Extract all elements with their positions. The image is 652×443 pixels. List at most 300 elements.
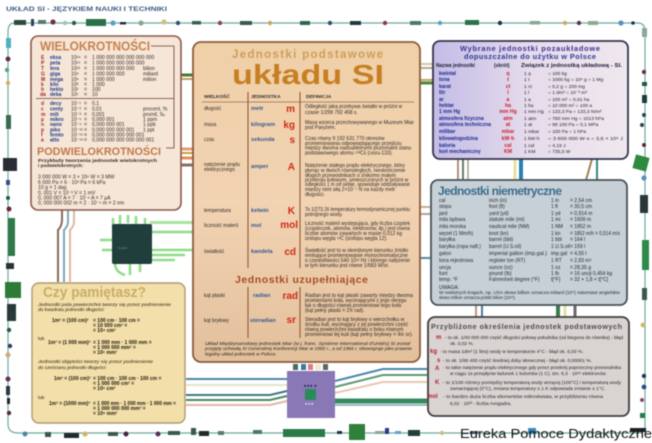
table rows: q	[506, 71, 510, 77]
prefix table: multiples: M	[41, 77, 45, 83]
prefix table: submultiples: 10⁻⁹	[71, 122, 82, 128]
entry: ampere: w ciągu 1s przepłynie ładunek 1 kulomba (1 C), tzn. 6,3 · 10¹⁸ elektronów.	[450, 371, 607, 377]
examples text: i podwielokrotnych:	[38, 163, 84, 169]
table header	[202, 92, 414, 338]
panel: czy pamiętasz	[32, 283, 185, 423]
table rows: litr	[439, 90, 445, 96]
volume unit conversions: 1m³ = (1000 mm)³	[49, 401, 90, 407]
table rows: = 28,35 g	[570, 265, 591, 271]
prefix table: multiples: 100	[92, 87, 101, 93]
table rows: knot (kn)	[489, 231, 509, 237]
table rows: 1 bbl	[551, 237, 562, 243]
row: kilogram: kilogram	[251, 122, 275, 128]
row: mol	[204, 220, 410, 242]
entry: metre: m	[436, 335, 441, 341]
table rows: ct	[506, 84, 511, 90]
volume unit conversions: = 1 000 mm · 1 000 mm · 1 000 mm =	[93, 401, 176, 407]
row: sekunda: czas	[204, 137, 215, 143]
row: metr: metr	[251, 106, 264, 112]
table rows: 1 RT	[551, 258, 562, 264]
volume unit conversions: do sześcianu jednostki długości:	[38, 365, 107, 371]
green circuit chip	[100, 215, 193, 275]
row: radian: promieniami koła, wycinającymi z jego okręgu	[305, 298, 407, 304]
table rows: = 98 100 Pa = 0,1 MPa	[548, 122, 599, 128]
prefix table: multiples: eksa	[50, 55, 61, 61]
heading: Przybliżone określenia jednostek podstawowych	[431, 322, 622, 331]
prefix table: submultiples: 10⁻³	[71, 112, 81, 118]
row: amper: odległości 1 m od siebie, spowoduje oddziaływanie	[305, 182, 410, 188]
table rows: t[°F]	[551, 277, 561, 283]
table rows	[438, 198, 620, 283]
panel: jednostki niemetryczne	[431, 180, 627, 305]
row: radian: radian	[253, 293, 271, 299]
row: sekunda	[204, 135, 411, 156]
prefix table: multiples: miliard	[143, 72, 158, 78]
volume unit conversions: 1m³ = (100 cm)³	[54, 376, 91, 382]
table rows: = 133,3 Pa = 133,3 N/m²	[548, 109, 602, 115]
prefix table: submultiples: 10⁻¹²	[71, 128, 83, 134]
prefix table: multiples: =	[84, 55, 87, 61]
row: kelwin: temperatura	[204, 208, 231, 214]
note	[439, 285, 621, 300]
table rows: baryłka	[439, 237, 455, 243]
area unit conversions: do kwadratu jednostki długości:	[38, 307, 105, 313]
area unit conversions: = 10 000 cm² =	[93, 323, 127, 329]
row: amper: natężenie prądu	[204, 162, 240, 168]
prefix table: multiples: 10¹	[71, 92, 79, 98]
table rows: 1 atm	[524, 116, 536, 122]
prefix table: multiples: G	[41, 72, 45, 78]
row: amper: amper	[251, 164, 269, 170]
table rows: 1 mm Hg	[524, 109, 544, 115]
table header: WIELKOŚĆ	[204, 92, 230, 100]
table rows: nautical mile (NM)	[489, 224, 530, 230]
volume unit conversions	[37, 359, 176, 417]
examples text: 0, 001 V = 10⁻³ V = 1 mV	[38, 190, 96, 196]
row: amper: płynąc w dwóch równoległych, nieskończenie	[305, 168, 406, 174]
volume unit conversions: = 100 cm · 100 cm · 100 cm =	[93, 376, 161, 382]
area unit conversions	[37, 302, 171, 356]
prefix table: submultiples: c	[41, 106, 44, 112]
purple chip	[287, 364, 335, 418]
volume unit conversions: = 1 000 000 000 mm³ =	[93, 406, 146, 412]
row: kilogram: Masa wzorca przechowywanego w Muzeum Miar	[305, 120, 414, 126]
row: amper: Natężenie stałego prądu elektrycznego, który	[305, 163, 406, 169]
prefix table: submultiples: 0,000 000 000 000 000 001	[92, 138, 154, 144]
table rows: = 760 mm Hg = 1013 hPa	[548, 116, 604, 122]
table rows: koń mechaniczny	[439, 149, 481, 155]
table rows: = 100 Pa = 1 hPa	[548, 129, 586, 135]
entry: ampere: A	[435, 366, 440, 372]
row: amper: długich przewodnikach o znikomo małym	[305, 173, 396, 179]
table rows: KM	[504, 149, 512, 155]
footnote: przyjęty uchwałą XI Generalnej Konferencji Miar w 1960 r., a od 1966 r. obowiązuje jako prawnie	[204, 346, 412, 352]
prefix table: submultiples: 10⁻²	[71, 106, 81, 112]
row: sekunda: s	[289, 135, 295, 146]
prefix table: submultiples: 0,000 000 001	[92, 122, 125, 128]
row: mol: (cząsteczek, atomów, elektronów, itp.) jest równa	[305, 226, 410, 232]
row: kandela: o częstotliwości 540·10¹² Hz i którego natężenie	[305, 258, 410, 264]
row: metr: czasie 1/299 792 458 s.	[305, 110, 358, 116]
row: mol: Liczność materii występująca, gdy liczba cząstek	[305, 221, 410, 227]
entry: kelvin: K	[435, 380, 440, 386]
row: mol: mol	[280, 220, 298, 231]
area unit conversions: = 100 cm · 100 cm =	[93, 318, 140, 324]
volume unit conversions: lub	[38, 395, 45, 401]
entry: ampere: - to takie natężenie prądu elektrycznego gdy przez przekrój poprzeczny przewodnika	[443, 365, 621, 371]
row: kandela	[204, 246, 410, 269]
prefix table: multiples: da	[40, 92, 46, 98]
table rows: mila morska	[439, 224, 466, 230]
prefix table: multiples: P	[41, 60, 45, 66]
prefix table: multiples	[36, 46, 174, 148]
row: kelwin: To 1/273,16 temperatury termodynamicznej punktu	[305, 207, 410, 213]
table rows: = 735,5 W	[548, 149, 571, 155]
table rows: tona rejestrowa	[439, 258, 473, 264]
row: kandela: emitujące promieniowanie monochromatyczne	[305, 253, 408, 259]
table rows: 1 U.S.oil	[551, 244, 570, 250]
heading	[460, 44, 600, 61]
row: kelwin	[204, 206, 410, 218]
prefix table: submultiples: 0,000 001	[92, 117, 115, 123]
row: kandela: kandela	[251, 249, 273, 255]
heading: dopuszczalne do użytku w Polsce	[464, 52, 596, 61]
prefix table: submultiples: =	[84, 138, 87, 144]
table rows: = 1609 m	[570, 217, 591, 223]
green circuit chip: SI 2024	[118, 246, 127, 250]
prefix table: multiples: 1 000	[92, 82, 105, 88]
table rows: ar	[439, 97, 444, 103]
row: amper: przekroju kołowym, umieszczonych w próżni w	[305, 178, 409, 184]
prefix table: submultiples: m	[41, 112, 46, 118]
row: kelwin: K	[288, 206, 296, 217]
table rows: 1 oz	[551, 265, 561, 271]
entry: ampere	[435, 365, 621, 377]
table rows: = 1852 m	[570, 224, 591, 230]
row: steradian: równą powierzchni kwadratu o boku równym	[305, 327, 403, 333]
table rows: ha	[505, 103, 511, 109]
table rows: register ton (RT)	[489, 258, 526, 264]
prefix table: submultiples: 0,001	[92, 112, 105, 118]
prefix table: submultiples: atto	[50, 138, 59, 144]
heading: Wybrane jednostki pozaukładowe	[460, 44, 600, 53]
prefix table: multiples: deka	[50, 92, 62, 98]
table rows: = 4,55 l	[570, 251, 587, 257]
table rows: Fahrenheit degree (°F)	[489, 277, 540, 283]
table rows: inch (in)	[489, 198, 507, 204]
entry: second: - to ok. 1/86 400 część średniej doby słonecznej - błąd ok. 0,00001 %.	[443, 358, 592, 364]
table rows: kW·h	[502, 136, 514, 142]
table rows: t	[507, 77, 509, 83]
prefix table: multiples: 10¹⁸	[71, 55, 81, 61]
entry: mole: - to bardzo duża liczba elementów mikroświata, w przybliżeniu równa	[443, 394, 603, 400]
prefix table: submultiples: =	[84, 128, 87, 134]
row: amper: elektrycznego	[204, 167, 235, 173]
table rows: = 3 600 000 W·s = 3,6 × 10⁶ J	[548, 136, 624, 142]
table rows: yard (yd)	[489, 211, 509, 217]
area unit conversions: = 1 000 000 mm² =	[93, 345, 136, 351]
row: kelwin: potrójnego wody.	[305, 212, 343, 218]
table rows: = 30,5 cm	[570, 204, 592, 210]
table rows: 1 yd	[551, 211, 561, 217]
row: radian: rad	[282, 291, 298, 302]
prefix table: submultiples: 10⁻¹⁵	[71, 132, 83, 138]
prefix table: submultiples: =	[84, 101, 87, 107]
row: kilogram: kg	[283, 120, 295, 131]
table rows: 1 ha	[524, 103, 534, 109]
prefix table: multiples: 10³	[71, 82, 79, 88]
purple chip: ■ ■ ■ ■	[304, 384, 316, 388]
prefix table: multiples: 10¹²	[71, 66, 80, 72]
row: radian: Radian jest to kąt płaski zawarty między dwoma	[305, 293, 413, 299]
area unit conversions: = 10⁶ mm²	[93, 350, 117, 356]
table rows: atmosfera fizyczna	[439, 116, 484, 122]
row: amper: długości.	[305, 192, 325, 198]
footnote	[204, 341, 412, 358]
table rows: 1 in	[551, 198, 559, 204]
table rows: karat	[439, 84, 451, 90]
prefix table: multiples: giga	[50, 72, 60, 78]
entry: kelvin: - to 1/100 różnicy pomiędzy temperaturą wody wrzącej (100°C) i temperaturą wody	[443, 380, 622, 386]
prefix table: multiples: 1 000 000 000	[92, 72, 125, 78]
table rows: 1 ft	[551, 204, 559, 210]
prefix table: submultiples: piko	[50, 128, 60, 134]
table rows: l	[507, 90, 509, 96]
table rows: 1 t	[524, 77, 530, 83]
entry: kelvin: zamarzającej (0°C), zmiana temperatury o 1 K odpowiada zmianie o 1°C.	[450, 386, 606, 392]
table rows: stopa	[439, 204, 451, 210]
table header	[436, 63, 623, 69]
prefix table: multiples: =	[84, 60, 87, 66]
row: sekunda: między dwoma nadsubtelnymi poziomami stanu	[305, 146, 411, 152]
table rows: = 0,914 m	[570, 211, 592, 217]
prefix table: submultiples: 1 ppb	[143, 122, 156, 128]
prefix table: submultiples: mikro	[50, 117, 64, 123]
examples text: 10 g = 1 dag	[38, 185, 67, 191]
prefix table: submultiples: promil, ‰	[143, 112, 165, 118]
table rows: imperial gallon (imp.gal.)	[489, 251, 547, 257]
panel: jednostki podstawowe	[193, 42, 420, 362]
table rows: milibar	[439, 129, 455, 135]
prefix table: multiples: =	[84, 82, 87, 88]
panel: jednostki pozaukładowe	[433, 41, 628, 159]
prefix table: submultiples: 0,1	[92, 101, 99, 107]
table header: (skrót)	[494, 63, 510, 69]
table rows: 1 NM	[551, 224, 563, 230]
table rows: = 164 l	[570, 237, 585, 243]
row: mol: izotopu węgla ¹²C (izotopu węgla 12).	[305, 236, 388, 242]
row: steradian: środku kuli, wycinający z jej powierzchni część	[305, 322, 409, 328]
table header: JEDNOSTKA	[251, 94, 281, 100]
table rows: kwintal	[439, 71, 457, 77]
table rows: 1 ct	[524, 84, 533, 90]
table rows: pound (lb)	[489, 271, 512, 277]
row: mol: liczność materii	[204, 223, 238, 229]
prefix table: submultiples: µ	[41, 117, 44, 123]
table rows: 1 cal	[524, 143, 534, 149]
subtitle: Jednostki podstawowe	[232, 49, 383, 61]
table rows: 1 mi	[551, 217, 560, 223]
table rows: kilowatogodzina	[439, 136, 478, 142]
prefix table: submultiples: =	[84, 112, 87, 118]
row: sekunda: Czas równy 9 192 631 770 okresów	[305, 136, 385, 142]
heading: podwielokrotności: PODWIELOKROTNOŚCI	[37, 145, 161, 158]
table rows: tona	[439, 77, 450, 83]
page title: UKŁAD SI - JĘZYKIEM NAUKI I TECHNIKI	[6, 6, 167, 13]
entry: mole: 6,02 · 10²³ - liczba Avogadra.	[450, 401, 512, 407]
prefix table: multiples: E	[41, 55, 45, 61]
row: radian: łuk o długości równej promieniowi tego koła	[305, 303, 401, 309]
note: słowo trillion oznacza polski bilion (10¹²).	[439, 295, 516, 300]
note: W niektórych krajach, np. USA słowo billion oznacza miliard (10⁹) natomiast angielskie	[439, 290, 621, 295]
footnote: legalny układ jednostek w Polsce.	[205, 352, 277, 358]
prefix table: multiples: bilion	[143, 66, 155, 72]
heading: jednostki uzupełniające: Jednostki uzupełniające	[235, 274, 368, 286]
entry: kilogram: kg	[430, 349, 437, 355]
prefix table: multiples: h	[41, 87, 44, 93]
panel: przybliżone określenia	[427, 317, 629, 416]
row: steradian: steradian	[250, 318, 276, 324]
table rows: uncja	[439, 265, 451, 271]
prefix table: multiples: =	[84, 77, 87, 83]
prefix table: multiples: T	[41, 66, 44, 72]
table rows: mbar	[502, 129, 514, 135]
row: kilogram: pod Paryżem.	[305, 125, 336, 131]
row: amper	[204, 162, 410, 198]
table rows: hektar	[439, 103, 454, 109]
entry: second: s	[437, 358, 441, 364]
row: steradian: Steradian jest to kąt bryłowy o wierzchołku w	[305, 317, 405, 323]
prefix table: multiples: 1 000 000	[92, 77, 115, 83]
prefix table: multiples: =	[84, 92, 87, 98]
row: kandela: cd	[284, 247, 296, 258]
table rows: at	[506, 122, 511, 128]
area unit conversions: 1m² = (100 cm)²	[52, 318, 89, 324]
prefix table: multiples: hekto	[50, 87, 63, 93]
prefix table: submultiples: a	[41, 138, 44, 144]
prefix table: multiples: milion	[143, 77, 156, 83]
prefix table: submultiples: procent, %	[143, 106, 168, 112]
table rows: barrel (U.S.oil)	[489, 244, 522, 250]
prefix table: multiples: mega	[50, 77, 63, 83]
row: kandela: w tym kierunku jest równe 1/683 W/sr.	[305, 263, 389, 269]
prefix table: submultiples: 0,000 000 000 001	[92, 128, 135, 134]
footnote: Układ Międzynarodowy jednostek Miar (w j. franc. Système International d'Unités) SI został	[205, 341, 411, 347]
row: amper: między nimi siłą 2×10⁻⁷ N na każdy metr	[305, 187, 396, 193]
volume unit conversions: = 1 000 000 cm³ =	[93, 381, 134, 387]
table header: Związek z jednostką układową - SI.	[521, 63, 623, 69]
area unit conversions: = 10⁴ cm²	[93, 328, 116, 334]
volume unit conversions: = 10⁶ cm³	[93, 386, 116, 392]
table rows: funt	[439, 271, 448, 277]
row: mol: liczbie atomów zawartych w masie 0,012 kg	[305, 231, 402, 237]
examples text: 0, 000 000 002 m = 2 · 10⁻⁹ m = 2 nm	[38, 200, 124, 206]
row: steradian	[204, 315, 413, 338]
examples text: 3 000 000 W = 3 × 10⁶ W = 3 MW	[38, 174, 115, 180]
prefix table: submultiples: femto	[50, 132, 64, 138]
heading: Jednostki niemetryczne	[438, 184, 562, 198]
table rows: 1 mm Hg	[439, 109, 460, 115]
table rows: foot (ft)	[489, 204, 505, 210]
table rows: = 16 uncji 0,454 kg	[570, 271, 612, 277]
table rows: galon	[439, 251, 451, 257]
prefix table: multiples: =	[84, 87, 87, 93]
footer credit: Eureka Pomoce Dydaktyczne	[460, 427, 652, 441]
row: sekunda: promieniowania odpowiadającego przejściu	[305, 141, 402, 147]
area unit conversions: Jednostki pola powierzchni tworzy się przez podniesienie	[37, 302, 171, 308]
entry: metre	[436, 335, 623, 347]
prefix table: submultiples: =	[84, 132, 87, 138]
table rows: = 100 kg	[548, 71, 567, 77]
prefix table: multiples: 10⁶	[71, 77, 79, 83]
table rows: 1 mbar	[524, 129, 540, 135]
table rows: 1 q	[524, 71, 531, 77]
table header: Nazwa jednostki	[436, 63, 476, 69]
table rows	[439, 71, 624, 155]
table rows: baryłka (ropa naft.)	[439, 244, 481, 250]
row: metr: długość	[204, 106, 222, 112]
prefix table: submultiples: =	[84, 117, 87, 123]
prefix table: submultiples: p	[41, 128, 44, 134]
prefix table: submultiples: decy	[50, 101, 62, 107]
examples text: Przykłady tworzenia jednostek wielokrotnych	[38, 158, 157, 164]
volume unit conversions: = 10⁹ mm³	[93, 411, 118, 417]
prefix table: submultiples: 1 ppm	[143, 117, 157, 123]
table rows: statute mile (mi)	[489, 217, 525, 223]
table rows: = 100 m² = 0,01 ha	[548, 97, 590, 103]
prefix table: submultiples: 10⁻⁶	[71, 117, 81, 123]
wiring between panels	[58, 64, 597, 405]
area unit conversions: = 1 000 mm · 1 000 mm =	[93, 340, 152, 346]
table rows: = 159 l	[570, 244, 585, 250]
entry: mole: mol	[427, 394, 438, 400]
prefix table: submultiples: mili	[50, 112, 59, 118]
table rows: 1 l	[524, 90, 529, 96]
prefix table: submultiples: 10⁻¹⁸	[71, 138, 83, 144]
table rows: 1 kW·h	[524, 136, 540, 142]
table rows: cal	[439, 198, 445, 204]
prefix table: multiples: 10⁹	[71, 72, 79, 78]
row: radian: (kąt pełny płaski = 2π rad).	[305, 308, 364, 314]
row: kelwin: kelwin	[251, 208, 269, 214]
prefix table: submultiples: =	[84, 106, 87, 112]
prefix table: multiples: 10²	[71, 87, 79, 93]
entry: kelvin	[435, 380, 622, 392]
prefix table: multiples: 1 000 000 000 000 000 000	[92, 55, 154, 61]
prefix table: multiples: tera	[50, 66, 59, 72]
table rows: = 1000 kg = 10⁶ g = 1 Mg	[548, 77, 603, 83]
table rows: cal	[504, 143, 512, 149]
row: kilogram: masa	[204, 122, 216, 128]
row: sekunda: podstawowego atomu ¹³³Cs (cezu-133).	[305, 150, 393, 156]
prefix table: submultiples: 1 ppt	[143, 128, 155, 134]
table rows: mm Hg	[499, 109, 517, 115]
entry: mole	[427, 394, 603, 407]
note: UWAGA:	[439, 285, 459, 291]
prefix table: submultiples: d	[41, 101, 44, 107]
table rows: = 2,54 cm	[570, 198, 592, 204]
table rows: jard	[438, 211, 448, 217]
table rows: 1 KM	[524, 149, 535, 155]
examples text: 6 000 Pa = 6 · 10³ Pa = 6 kPa	[38, 180, 106, 186]
prefix table: submultiples	[41, 101, 168, 144]
table rows: = 1852 m/h = 0,514 m/s	[570, 231, 620, 237]
prefix table: multiples: 10	[92, 92, 98, 98]
entry: kilogram: - to masa 1dm³ (1 litra) wody w temperaturze 4°C - błąd ok. 0,03 %.	[440, 349, 583, 355]
main title: układu SI	[232, 59, 384, 90]
examples text	[38, 158, 157, 206]
prefix table: submultiples: 0,01	[92, 106, 102, 112]
